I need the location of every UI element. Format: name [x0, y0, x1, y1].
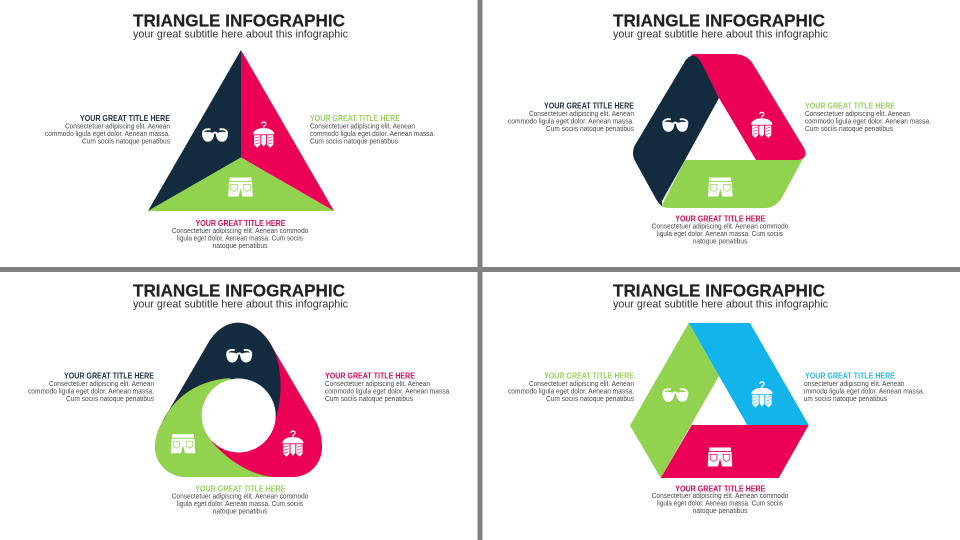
- subtitle: your great subtitle here about this infographic: [133, 28, 348, 40]
- icon: hanger with ties: [253, 122, 274, 148]
- text block: bottom: ligula eget dolor. Aenean massa. Cum sociis: [657, 498, 783, 508]
- text block: left: Cum sociis natoque penatibus: [546, 124, 634, 133]
- segment: crimson: [661, 425, 809, 478]
- segment: green: [662, 153, 806, 208]
- text block: bottom: ligula eget dolor. Aenean massa. Cum sociis: [177, 499, 303, 508]
- diagram: swirl segments: [155, 323, 322, 477]
- subtitle: your great subtitle here about this infographic: [613, 28, 828, 40]
- text block: left: Consectetuer adipiscing elit. Aenean: [49, 379, 154, 388]
- text block: right: commodo ligula eget dolor. Aenean massa.: [805, 116, 931, 126]
- text block: right: Cum sociis natoque penatibus: [799, 394, 887, 403]
- text block: bottom: YOUR GREAT TITLE HERE: [196, 219, 286, 228]
- text block: bottom: [172, 484, 308, 516]
- text block: right: YOUR GREAT TITLE HERE: [805, 102, 895, 110]
- segment: crimson: [241, 50, 334, 211]
- text block: left: YOUR GREAT TITLE HERE: [544, 372, 634, 380]
- text block: left: commodo ligula eget dolor. Aenean massa.: [508, 116, 634, 126]
- text block: right: Consectetuer adipiscing elit. Aenean: [325, 379, 430, 388]
- text block: right: commodo ligula eget dolor. Aenean massa.: [798, 386, 924, 396]
- diagram: sharp ribbon segments: [630, 323, 809, 478]
- text block: left: YOUR GREAT TITLE HERE: [80, 114, 170, 123]
- text block: right: Consectetuer adipiscing elit. Aenean: [805, 109, 910, 118]
- text block: right: [805, 102, 931, 133]
- text block: bottom: YOUR GREAT TITLE HERE: [675, 484, 766, 494]
- text block: bottom: Consectetuer adipiscing elit. Aenean commodo: [652, 491, 788, 500]
- text block: bottom: ligula eget dolor. Aenean massa. Cum sociis: [657, 229, 783, 238]
- icon: sunglasses: [226, 350, 252, 362]
- segment: navy: [162, 323, 281, 423]
- text block: bottom: natoque penatibus: [693, 506, 748, 515]
- centre circle: [202, 378, 276, 452]
- text block: bottom: natoque penatibus: [213, 506, 268, 516]
- text block: left: Consectetuer adipiscing elit. Aenean: [529, 379, 634, 388]
- text block: left: Consectetuer adipiscing elit. Aenean: [65, 122, 170, 130]
- text block: left: commodo ligula eget dolor. Aenean massa.: [45, 129, 170, 138]
- panel: sharp hexagon: [508, 281, 924, 515]
- subtitle: your great subtitle here about this infographic: [133, 298, 348, 310]
- segment: crimson: [155, 323, 322, 477]
- icon: shorts: [708, 448, 732, 466]
- text block: right: [796, 372, 924, 403]
- text block: left: [28, 372, 154, 403]
- icon: hanger with ties: [282, 431, 303, 457]
- icon: hanger with ties: [751, 112, 772, 138]
- text block: left: YOUR GREAT TITLE HERE: [544, 102, 634, 110]
- text block: left: commodo ligula eget dolor. Aenean massa.: [508, 386, 634, 396]
- text block: bottom: natoque penatibus: [213, 241, 268, 250]
- segment: green: [155, 378, 276, 477]
- text block: left: Consectetuer adipiscing elit. Aenean: [529, 109, 634, 118]
- text block: bottom: Consectetuer adipiscing elit. Aenean commodo: [652, 222, 788, 230]
- diagram: rounded ribbon segments: [633, 54, 806, 208]
- segment: navy: [633, 56, 719, 206]
- diagram: triangle segments: [148, 50, 334, 211]
- text block: right: YOUR GREAT TITLE HERE: [310, 114, 400, 123]
- text block: left: commodo ligula eget dolor. Aenean massa.: [28, 386, 154, 396]
- text block: left: [45, 114, 170, 146]
- text block: left: YOUR GREAT TITLE HERE: [64, 372, 154, 380]
- segment: navy: [148, 50, 241, 211]
- segment: green: [148, 158, 334, 211]
- panel: rounded hexagon: [508, 11, 931, 246]
- icon: shorts: [228, 178, 253, 196]
- text block: right: Cum sociis natoque penatibus: [325, 394, 413, 403]
- text block: left: [508, 102, 634, 133]
- text block: right: [310, 114, 435, 146]
- text block: bottom: YOUR GREAT TITLE HERE: [675, 214, 766, 224]
- segment: crimson: [690, 54, 806, 160]
- text block: right: YOUR GREAT TITLE HERE: [325, 372, 415, 380]
- segment: blue: [689, 323, 809, 425]
- text block: bottom: [652, 484, 788, 515]
- text block: bottom: [652, 214, 788, 246]
- icon: sunglasses: [202, 129, 228, 142]
- text block: left: [508, 372, 634, 403]
- text block: right: Consectetuer adipiscing elit. Aenean: [800, 379, 904, 388]
- title: TRIANGLE INFOGRAPHIC: [613, 281, 825, 301]
- text block: bottom: Consectetuer adipiscing elit. Aenean commodo: [172, 226, 308, 235]
- text block: bottom: ligula eget dolor. Aenean massa. Cum sociis: [177, 234, 303, 242]
- text block: left: Cum sociis natoque penatibus: [66, 394, 154, 403]
- text block: right: Cum sociis natoque penatibus: [805, 124, 893, 133]
- icon: shorts: [708, 178, 733, 196]
- title: TRIANGLE INFOGRAPHIC: [133, 11, 345, 31]
- panel: solid triangle: [45, 11, 435, 250]
- text block: right: commodo ligula eget dolor. Aenean massa.: [325, 386, 451, 396]
- icon: sunglasses: [662, 119, 688, 132]
- panel: rounded triangle with circle: [28, 281, 451, 516]
- icon: sunglasses: [662, 389, 688, 402]
- subtitle: your great subtitle here about this infographic: [613, 298, 828, 310]
- text block: right: commodo ligula eget dolor. Aenean massa.: [310, 129, 435, 138]
- icon: hanger with ties: [752, 382, 772, 408]
- text block: bottom: YOUR GREAT TITLE HERE: [195, 484, 286, 494]
- text block: left: Cum sociis natoque penatibus: [82, 136, 170, 146]
- text block: right: YOUR GREAT TITLE HERE: [805, 372, 895, 380]
- title: TRIANGLE INFOGRAPHIC: [613, 11, 825, 31]
- segment: green: [630, 323, 719, 478]
- text block: left: Cum sociis natoque penatibus: [546, 394, 634, 403]
- text block: bottom: [172, 219, 308, 250]
- text block: bottom: natoque penatibus: [693, 236, 748, 246]
- text block: right: Cum sociis natoque penatibus: [310, 136, 398, 146]
- text block: right: Consectetuer adipiscing elit. Aenean: [310, 122, 415, 130]
- title: TRIANGLE INFOGRAPHIC: [133, 281, 345, 301]
- icon: shorts: [171, 434, 195, 453]
- text block: bottom: Consectetuer adipiscing elit. Aenean commodo: [172, 492, 308, 500]
- text block: right: [325, 372, 451, 403]
